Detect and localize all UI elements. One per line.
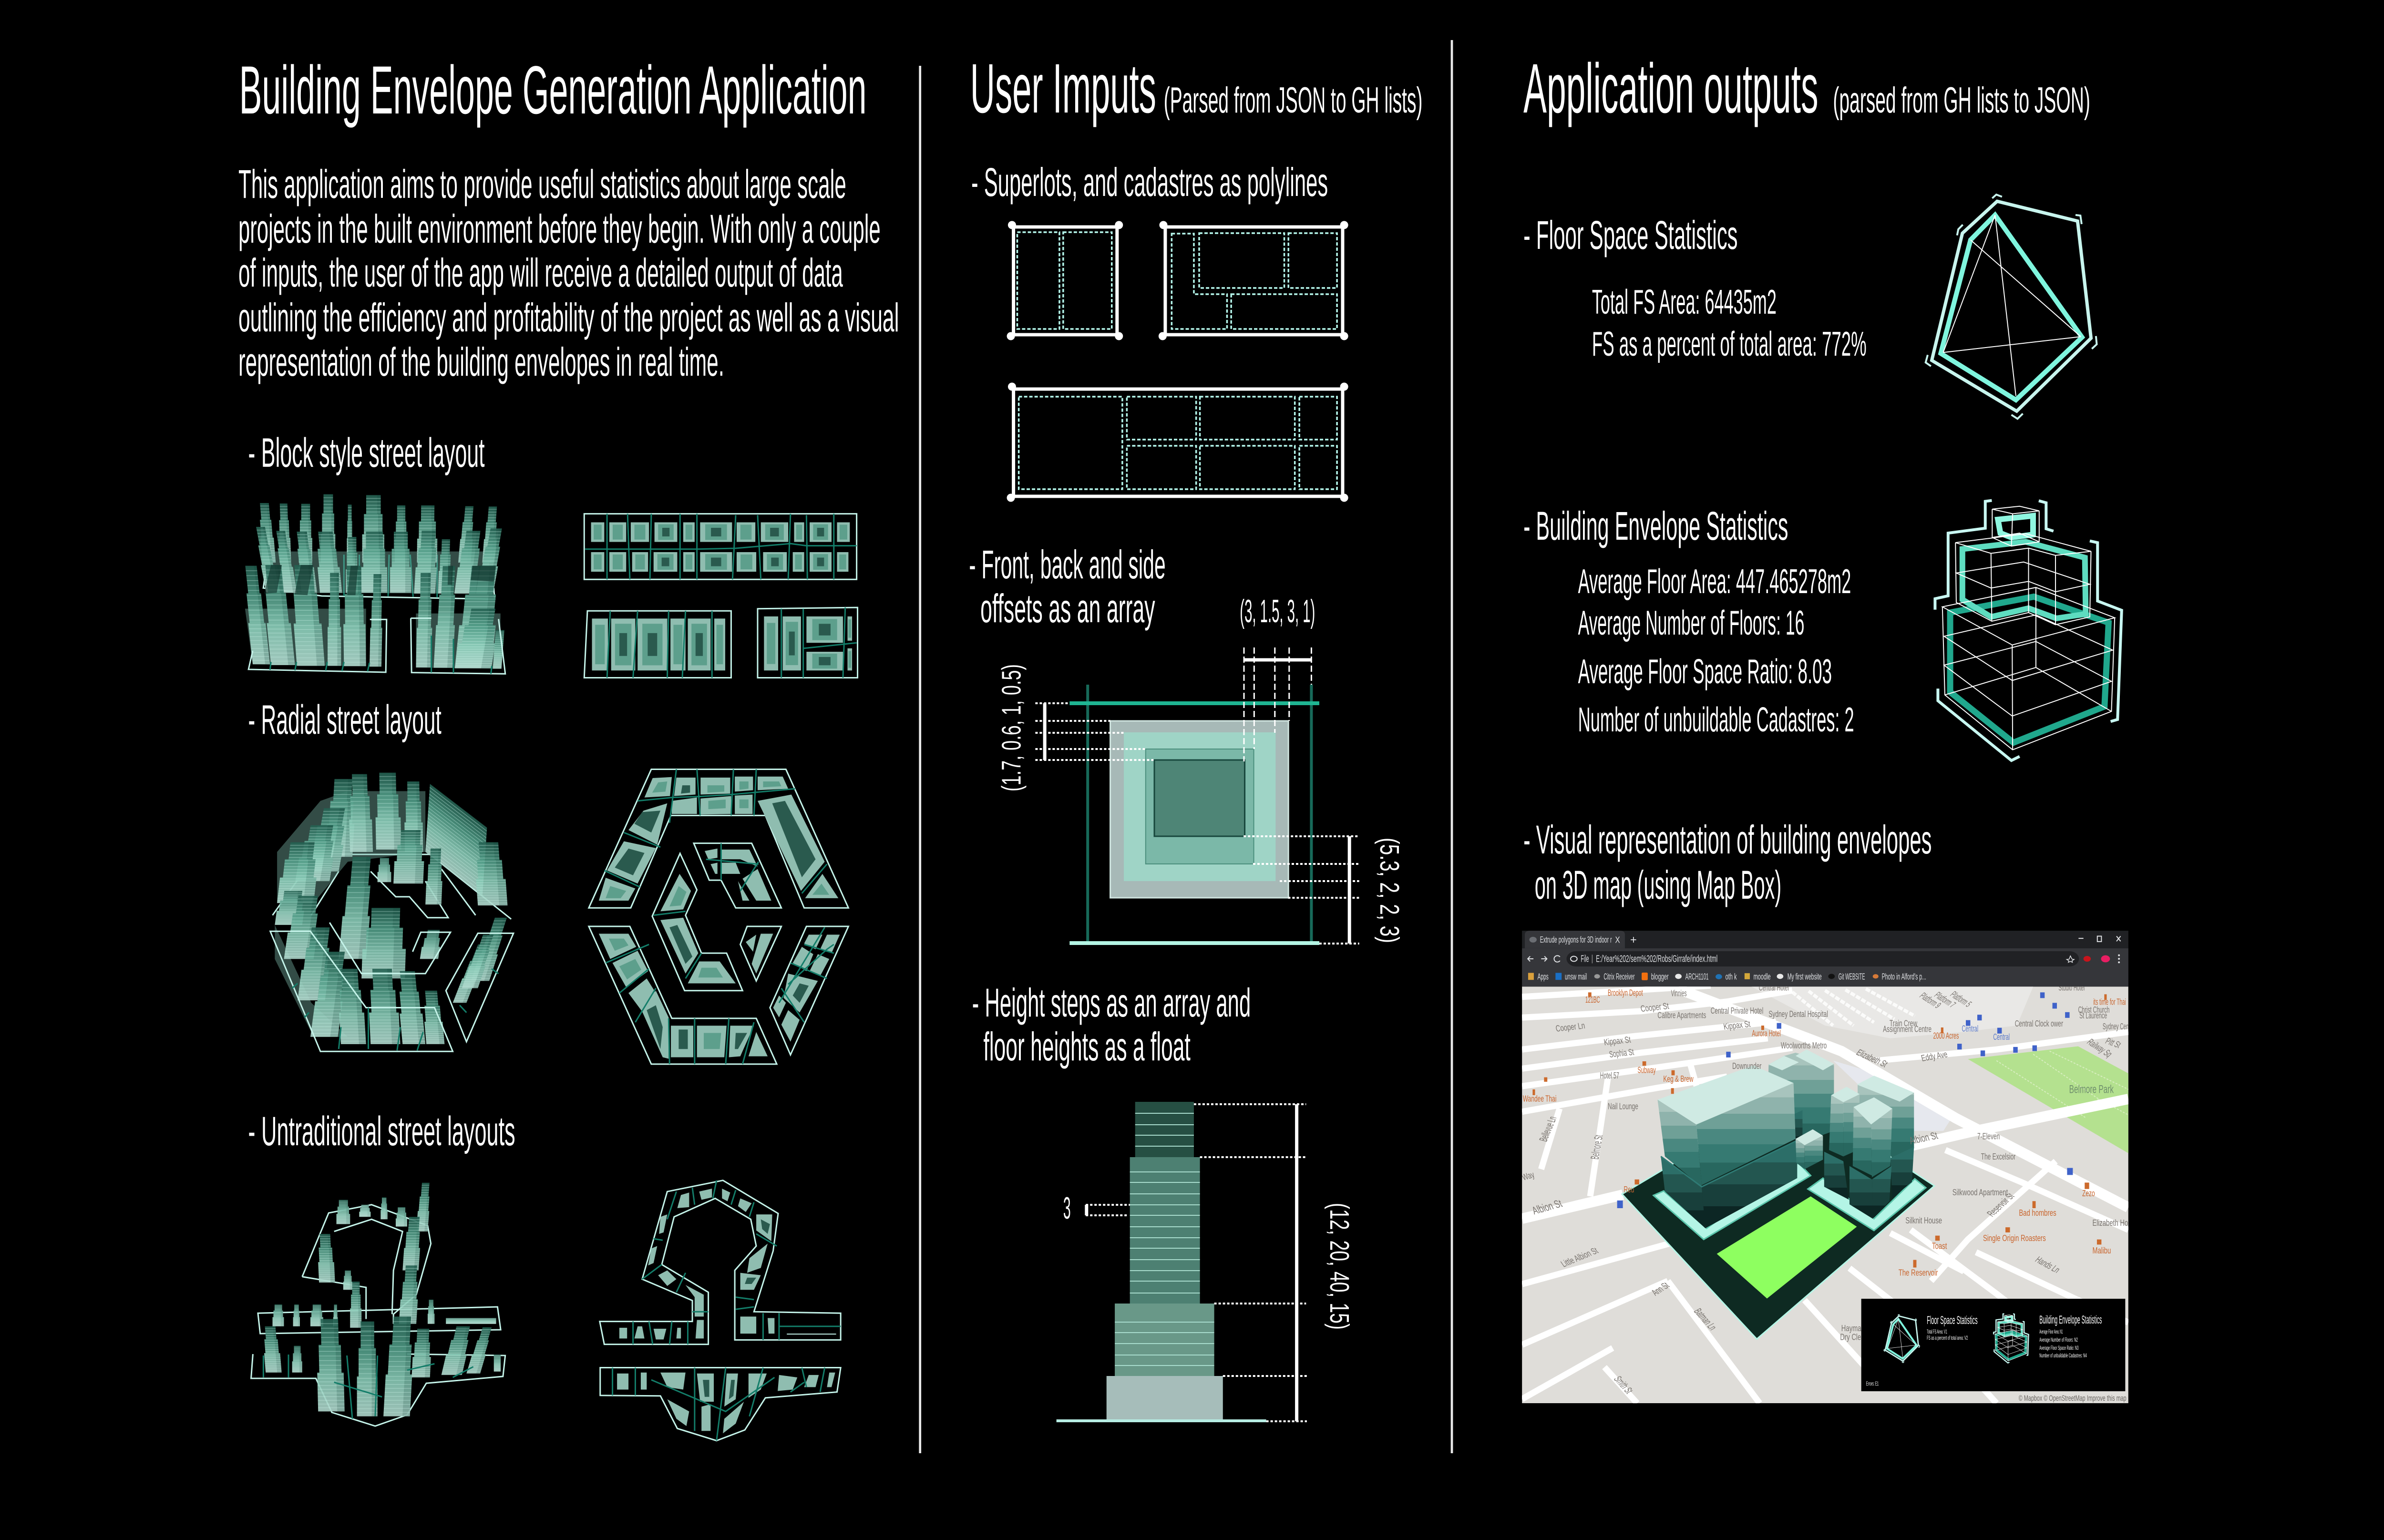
divider right bbox=[1451, 40, 1453, 1453]
untraditional layout site plan bbox=[600, 1181, 841, 1441]
browser chrome: + bbox=[1630, 933, 1637, 946]
heading: height steps: - Height steps as an array and bbox=[972, 981, 1251, 1026]
mini icon: radar bbox=[1884, 1314, 1920, 1363]
mini icon: building bbox=[1994, 1314, 2029, 1363]
heading: visual representation bbox=[1523, 818, 1932, 908]
right offset value label: (5.3, 2, 2, 3) bbox=[1375, 838, 1405, 943]
subheading: parsed from JSON: (Parsed from JSON to GH lists) bbox=[1164, 80, 1422, 121]
heading: height steps: floor heights as a float bbox=[983, 1025, 1191, 1069]
building envelope values: Average Floor Space Ratio: 8.03 bbox=[1578, 652, 1832, 691]
browser chrome: Citrix Receiver bbox=[1603, 972, 1634, 982]
map labels: Platform 9 bbox=[1917, 991, 1943, 1010]
mini text: Errors: E1 bbox=[1866, 1381, 1879, 1387]
map labels: Smith St bbox=[1612, 1375, 1635, 1396]
block layout site plan bottom right bbox=[758, 607, 858, 678]
browser chrome: oth k bbox=[1726, 972, 1737, 982]
map labels: Hands Ln bbox=[2033, 1255, 2062, 1275]
map labels: Eddy Ave bbox=[1920, 1049, 1949, 1063]
map labels: Silknit House bbox=[1905, 1216, 1942, 1226]
browser chrome: Apps bbox=[1538, 972, 1549, 982]
building envelope values: Average Floor Area: 447.465278m2 bbox=[1578, 562, 1851, 601]
map labels: its time for Thai bbox=[2093, 997, 2126, 1007]
map labels: Bad hombres bbox=[2019, 1208, 2056, 1218]
map labels: Sydney Dental Hospital bbox=[1768, 1009, 1828, 1019]
heading: untraditional layouts: - Untraditional street layouts bbox=[248, 1109, 515, 1154]
map labels: Bellevue Ln bbox=[1536, 1115, 1559, 1143]
map labels: The Reservoir bbox=[1899, 1268, 1938, 1278]
offsets diagram bbox=[1035, 647, 1359, 944]
map labels: Studio Hotel bbox=[2058, 983, 2085, 993]
floor height label: 3 bbox=[1063, 1191, 1071, 1225]
map labels: Little Albion St bbox=[1559, 1245, 1600, 1269]
map labels: Single Origin Roasters bbox=[1983, 1233, 2046, 1243]
map labels: Ann St bbox=[1649, 1280, 1672, 1297]
map labels: Subway bbox=[1637, 1066, 1656, 1076]
map labels: 2000 Acres bbox=[1933, 1031, 1959, 1041]
heading: block layout: - Block style street layout bbox=[248, 430, 485, 476]
map labels: Calibre Apartments bbox=[1657, 1011, 1706, 1020]
map labels: Vinnies bbox=[1671, 988, 1686, 998]
building envelope values: Number of unbuildable Cadastres: 2 bbox=[1578, 700, 1854, 739]
heading: superlots: - Superlots, and cadastres as polylines bbox=[971, 160, 1328, 205]
left column: building envelope generation bbox=[238, 52, 899, 1441]
map labels: Central bbox=[1962, 1024, 1978, 1034]
browser chrome: unsw mail bbox=[1565, 972, 1587, 982]
mini text: Number of unbuildable Cadastres: N4 bbox=[2039, 1353, 2087, 1359]
browser chrome: ARCH1101 bbox=[1685, 972, 1708, 982]
intro paragraph bbox=[238, 162, 899, 385]
heading: height steps bbox=[972, 981, 1251, 1069]
map labels: Way bbox=[1521, 1170, 1536, 1182]
mini text: Average Number of Floors: N2 bbox=[2039, 1337, 2078, 1343]
map labels: Cooper St bbox=[1640, 1001, 1670, 1014]
height steps tower diagram bbox=[1057, 1102, 1307, 1421]
heading: offsets bbox=[969, 543, 1166, 631]
intro paragraph: outlining the efficiency and profitability of the project as well as a visual bbox=[238, 296, 899, 340]
browser chrome: My first website bbox=[1788, 972, 1822, 982]
icon: floor space radar bbox=[1926, 195, 2097, 419]
map labels: Zezo bbox=[2082, 1189, 2095, 1199]
browser chrome: Extrude polygons for 3D indoor r bbox=[1540, 935, 1612, 945]
map labels: Central bbox=[1993, 1032, 2010, 1042]
3D map bbox=[1521, 983, 2138, 1403]
map labels: Batman Ln bbox=[1691, 1307, 1719, 1332]
heading: offsets: - Front, back and side bbox=[969, 543, 1166, 587]
superlot diagram 3 bbox=[1011, 387, 1344, 498]
block layout site plan top bbox=[584, 514, 857, 579]
heading: application outputs: Application outputs bbox=[1523, 50, 1819, 128]
floor space values: Total FS Area: 64435m2 bbox=[1592, 283, 1777, 321]
map labels: Elizabeth House bbox=[2092, 1218, 2138, 1228]
floor space values: FS as a percent of total area: 772% bbox=[1592, 325, 1867, 363]
mini text bbox=[1866, 1313, 2102, 1387]
right column: application outputs bbox=[1521, 50, 2138, 1403]
intro paragraph: projects in the built environment before they begin. With only a couple bbox=[238, 207, 881, 252]
map labels: Albion St bbox=[1530, 1198, 1564, 1217]
map labels: 121BC bbox=[1585, 995, 1600, 1005]
map statistics panel bbox=[1861, 1299, 2125, 1391]
subheading: parsed to JSON: (parsed from GH lists to JSON) bbox=[1833, 80, 2090, 121]
map labels: Platform 7 bbox=[1932, 990, 1958, 1010]
mini text: FS as a percent of total area: V2 bbox=[1927, 1335, 1968, 1341]
side offset value label: (3, 1.5, 3, 1) bbox=[1240, 593, 1315, 629]
map labels bbox=[1521, 983, 2138, 1396]
map labels: Dry Clea bbox=[1840, 1332, 1864, 1342]
floor space values bbox=[1592, 283, 1867, 363]
map labels: Kippax St bbox=[1603, 1035, 1632, 1047]
map labels: 7-Eleven bbox=[1977, 1132, 2000, 1141]
untraditional layout 3D massing bbox=[251, 1183, 505, 1426]
heading: user inputs: User Imputs bbox=[970, 50, 1156, 128]
map labels: Reservoir St bbox=[1984, 1191, 2017, 1218]
map labels: Central Private Hotel bbox=[1711, 1006, 1763, 1016]
divider left bbox=[919, 66, 921, 1453]
icon: stepped building wireframe bbox=[1935, 501, 2122, 760]
superlot diagram 1 bbox=[1011, 225, 1119, 336]
map labels: Belmore St bbox=[1588, 1134, 1605, 1160]
superlot diagram 2 bbox=[1162, 225, 1344, 336]
map labels: Brooklyn Depot bbox=[1608, 988, 1643, 998]
block layout site plan bottom left bbox=[584, 611, 731, 678]
intro paragraph: of inputs, the user of the app will receive a detailed output of data bbox=[238, 251, 843, 296]
browser chrome: Photo in Alford's p... bbox=[1882, 972, 1926, 982]
map labels: Albion St bbox=[1908, 1129, 1940, 1146]
building envelope values bbox=[1578, 562, 1854, 739]
map labels: Train Crew bbox=[1890, 1019, 1917, 1028]
heading: radial layout: - Radial street layout bbox=[248, 697, 442, 743]
map labels: Silkwood Apartment bbox=[1952, 1188, 2008, 1198]
map labels: Kippax St bbox=[1723, 1019, 1751, 1032]
title: Building Envelope Generation Application bbox=[239, 52, 867, 128]
mini text: Building Envelope Statistics bbox=[2039, 1313, 2102, 1326]
map labels: Reu bbox=[1624, 1185, 1634, 1195]
mini text: Average Floor Space Ratio: N3 bbox=[2039, 1345, 2078, 1351]
map labels: Sydney Central bbox=[2103, 1022, 2136, 1032]
map pins bbox=[1617, 992, 2073, 1208]
mini text: Floor Space Statistics bbox=[1927, 1314, 1978, 1327]
browser chrome: X bbox=[1615, 935, 1620, 945]
left offset value label: (1.7, 0.6, 1, 0.5) bbox=[996, 664, 1027, 791]
map labels: Belmore Park bbox=[2069, 1083, 2114, 1096]
block layout 3D massing bbox=[242, 494, 505, 674]
map labels: Woolworths Metro bbox=[1781, 1041, 1827, 1051]
browser screenshot bbox=[1521, 931, 2138, 1403]
middle column: user inputs bbox=[969, 50, 1422, 1421]
map labels: Assignment Centre bbox=[1883, 1025, 1932, 1034]
browser chrome bbox=[1522, 931, 2128, 986]
radial layout site plan bbox=[589, 769, 848, 1064]
map labels: Downunder bbox=[1732, 1062, 1761, 1071]
map labels: Hotel 57 bbox=[1600, 1071, 1619, 1081]
map labels: Pitt St bbox=[2104, 1036, 2123, 1050]
map labels: Malibu bbox=[2092, 1246, 2111, 1256]
map labels: Central Hotel bbox=[1759, 983, 1789, 993]
map labels: Railway Sq bbox=[2085, 1037, 2115, 1059]
map labels: St Laurence bbox=[2079, 1011, 2107, 1021]
map labels: Platform 5 bbox=[1948, 990, 1973, 1009]
map labels: Nail Lounge bbox=[1608, 1102, 1638, 1111]
browser chrome: moodle bbox=[1754, 972, 1771, 982]
map labels: The Excelsior bbox=[1981, 1152, 2015, 1162]
browser chrome: File bbox=[1581, 953, 1589, 964]
intro paragraph: representation of the building envelopes in real time. bbox=[238, 340, 724, 385]
map labels: Elizabeth St bbox=[1854, 1047, 1890, 1069]
heading: offsets: offsets as an array bbox=[980, 586, 1155, 631]
heading: visual representation: on 3D map (using Map Box) bbox=[1535, 863, 1781, 908]
radial layout 3D massing bbox=[270, 773, 514, 1051]
map labels: Keg & Brew bbox=[1663, 1074, 1694, 1084]
map labels: Central Clock ower bbox=[2015, 1019, 2063, 1029]
heading: building envelope statistics: - Building Envelope Statistics bbox=[1523, 504, 1788, 549]
heading: visual representation: - Visual representation of building envelopes bbox=[1523, 818, 1932, 862]
heading: floor space statistics: - Floor Space Statistics bbox=[1523, 213, 1738, 258]
map labels: Christ Church bbox=[2078, 1005, 2109, 1015]
map labels: Wandee Thai bbox=[1523, 1094, 1556, 1104]
map labels: Sophia St bbox=[1608, 1047, 1635, 1060]
browser chrome: blogger bbox=[1651, 972, 1669, 982]
map labels: Hayman bbox=[1841, 1324, 1865, 1333]
map labels: Toast bbox=[1932, 1241, 1947, 1251]
map labels: Cooper Ln bbox=[1555, 1021, 1586, 1034]
height steps value label: (12, 20, 40, 15) bbox=[1325, 1203, 1355, 1330]
browser chrome: Git WEBSITE bbox=[1839, 972, 1865, 982]
mini text: Average Floor Area: N1 bbox=[2039, 1329, 2063, 1335]
mini text: Total FS Area: V1 bbox=[1927, 1329, 1947, 1335]
intro paragraph: This application aims to provide useful statistics about large scale bbox=[238, 162, 846, 207]
building envelope values: Average Number of Floors: 16 bbox=[1578, 604, 1804, 642]
browser chrome: E:/Year%202/sem%202/Robs/Girrafe/index.html bbox=[1596, 953, 1717, 964]
map attribution: © Mapbox © OpenStreetMap Improve this map bbox=[2019, 1394, 2127, 1403]
map labels: Aurora Hotel bbox=[1752, 1029, 1781, 1039]
